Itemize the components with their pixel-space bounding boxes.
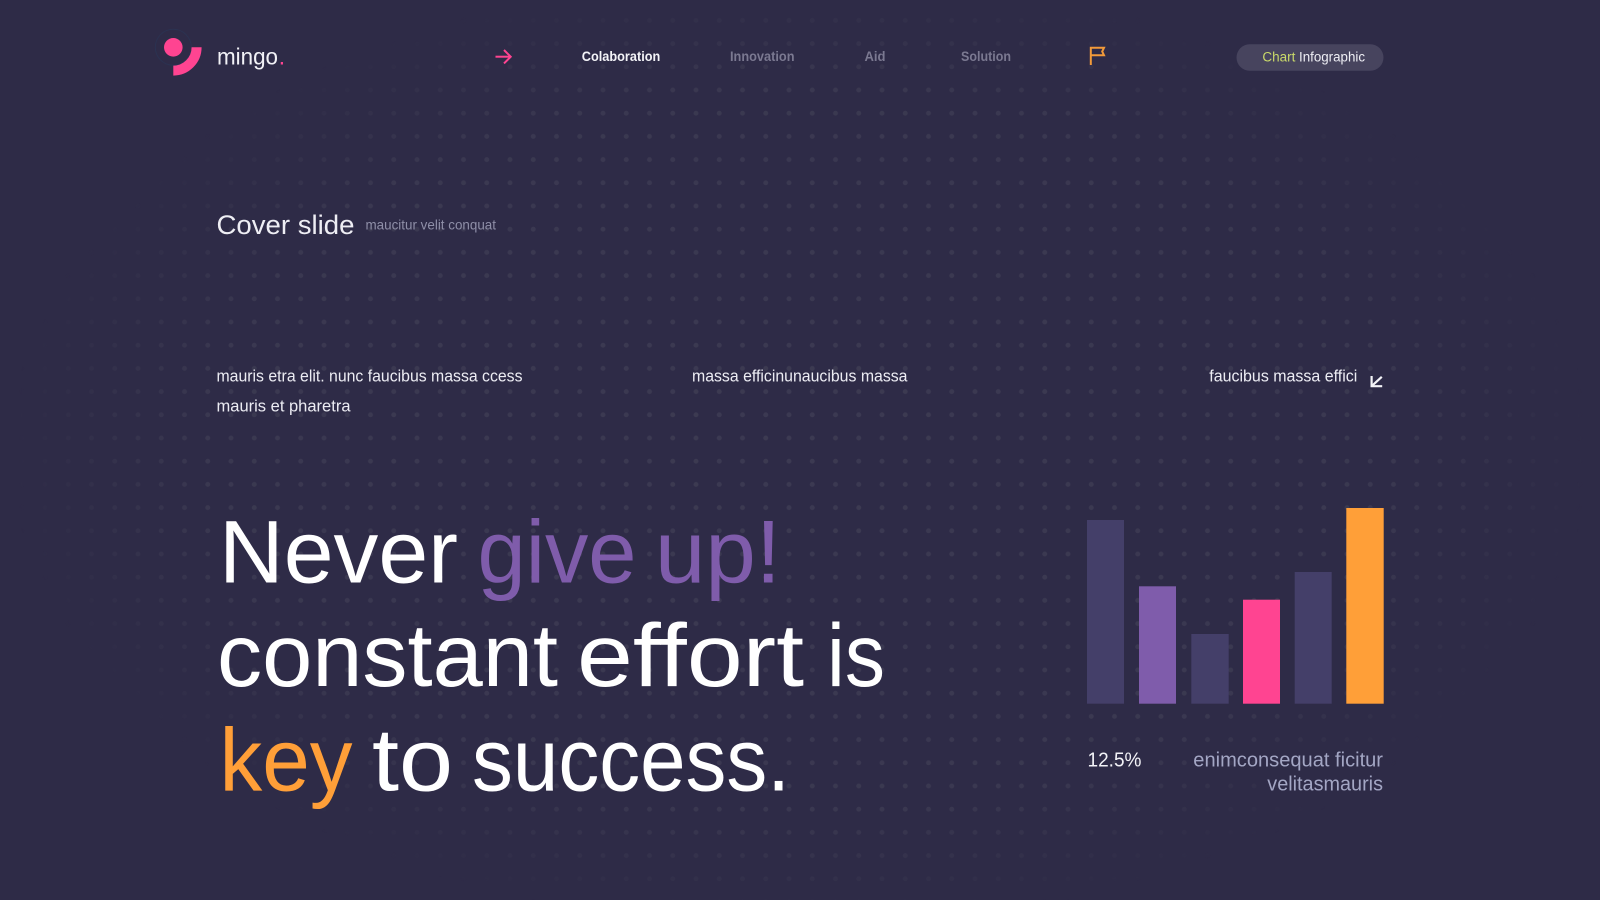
text block: left column: mauris et pharetra [216,396,351,416]
headline: give [478,502,636,601]
chart caption: velitasmauris [1267,774,1383,796]
icon: pink arrow [496,50,511,63]
headline: effort [577,606,804,705]
headline: Never [219,502,458,601]
headline: is [827,606,885,705]
heading: cover slide [216,210,496,240]
bar chart [1087,508,1384,704]
logo: mingo: mingo [217,43,278,69]
text block: right column: faucibus massa effici [1209,366,1357,386]
headline [217,502,885,809]
icon: down-left arrow [1372,376,1382,386]
badge: Chart Infographic [1236,44,1384,71]
logo: mingo [155,29,285,71]
badge: Chart Infographic: Chart [1262,50,1295,66]
text block: left column: mauris etra elit. nunc faucibus massa ccess [216,366,522,386]
stat: 12.5%: 12.5% [1088,750,1142,772]
text block: middle column: massa efficinunaucibus massa [692,366,908,386]
chart caption: enimconsequat ficitur [1193,750,1383,772]
headline: up! [655,502,781,601]
navigation menu: Solution [961,49,1011,64]
headline: to [372,710,453,809]
navigation menu: Aid [864,49,886,64]
headline: constant [217,606,558,705]
icon: orange flag [1091,48,1104,65]
text block: left column [216,366,522,416]
navigation menu: Innovation [730,49,794,64]
headline: key [220,710,353,809]
heading: cover slide: maucitur velit conquat [366,217,496,233]
badge: Chart Infographic: Infographic [1299,50,1365,66]
logo: mingo: . [279,43,285,69]
navigation menu: Colaboration [582,49,660,64]
chart caption [1193,750,1383,796]
headline: success. [472,710,790,809]
navigation menu [582,49,1011,64]
heading: cover slide: Cover slide [216,210,354,240]
